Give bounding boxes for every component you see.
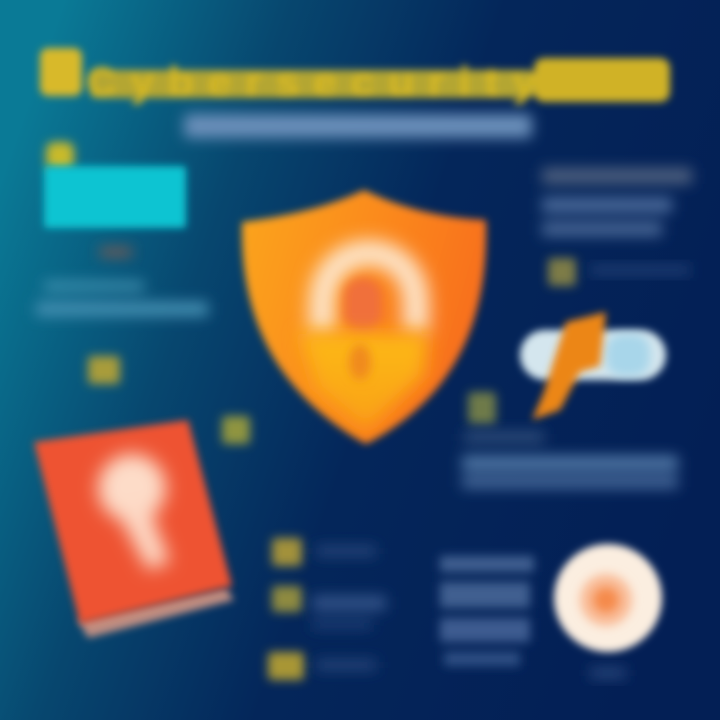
book cover xyxy=(34,420,232,624)
icon: capsule with orange bolt xyxy=(520,312,666,420)
text block: left upper xyxy=(36,248,208,316)
icon: small yellow square mid xyxy=(222,416,250,444)
key emblem xyxy=(98,454,170,570)
bullet 1 xyxy=(272,538,302,566)
title xyxy=(40,48,670,105)
padlock inner xyxy=(344,278,382,332)
text block: top right xyxy=(542,168,692,236)
icon: shield with padlock xyxy=(242,190,486,444)
book pages xyxy=(78,588,234,638)
keyhole xyxy=(349,344,371,380)
title: Cybersecurity xyxy=(86,58,537,105)
caption under target xyxy=(590,668,626,678)
icon: target circle xyxy=(554,544,662,652)
padlock shackle xyxy=(322,253,416,332)
list text xyxy=(312,546,386,670)
list: bullets xyxy=(268,538,386,680)
text line right xyxy=(590,266,690,274)
subtitle xyxy=(184,114,532,138)
capsule xyxy=(520,330,666,380)
bullet 2 xyxy=(272,586,302,612)
icon: small yellow square under capsule xyxy=(468,392,496,424)
icon: small yellow square right xyxy=(548,258,576,286)
bolt xyxy=(532,312,606,420)
icon: small yellow badge top left xyxy=(46,142,74,170)
text block: right middle xyxy=(462,432,678,488)
shield xyxy=(242,190,486,444)
panel: cyan block xyxy=(44,166,186,228)
capsule highlight xyxy=(606,334,650,376)
padlock body xyxy=(300,334,428,430)
icon: small yellow square left xyxy=(88,356,120,384)
bullet 3 xyxy=(268,652,304,680)
text block: bottom center-right xyxy=(440,556,534,666)
icon: red book xyxy=(34,420,234,638)
